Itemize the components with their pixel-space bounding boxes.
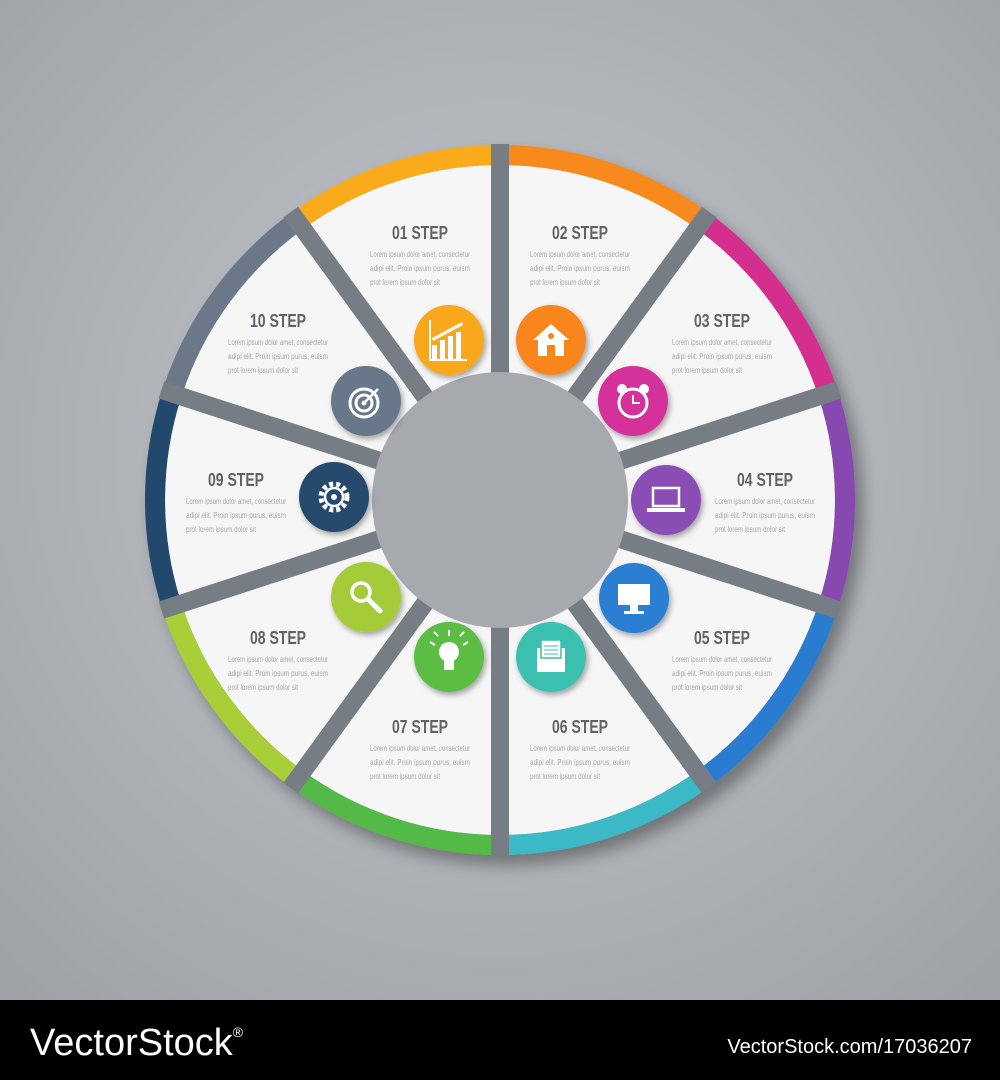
segment 09 [98,333,404,610]
text 02: prot lorem ipsum dolor sit [530,277,600,287]
text 03: prot lorem ipsum dolor sit [672,365,742,375]
icon 04: laptop [631,465,701,535]
watermark bar: ® [233,1024,244,1040]
icon 09: gear [299,462,369,532]
icon 06: mail [516,622,586,692]
segment 05 [532,531,838,808]
text 06: adipi elit. Proin ipsum purus, euism [530,757,630,767]
text 10: 10 STEP [250,311,306,331]
text 09: adipi elit. Proin ipsum purus, euism [186,510,286,520]
text 04: prot lorem ipsum dolor sit [715,524,785,534]
segment 06 [391,582,709,910]
text 07: prot lorem ipsum dolor sit [370,771,440,781]
text 02: Lorem ipsum dolor amet, consectetur [530,249,630,259]
text 04: adipi elit. Proin ipsum purus, euism [715,510,815,520]
text 06: prot lorem ipsum dolor sit [530,771,600,781]
text 07: 07 STEP [392,717,448,737]
segment 08 [122,459,441,787]
icon 03: alarm clock [598,366,668,436]
segment 07 [291,601,500,855]
text 05: 05 STEP [694,628,750,648]
text 10: adipi elit. Proin ipsum purus, euism [228,351,328,361]
watermark bar: VectorStock [30,1022,233,1064]
text 07 [370,717,470,781]
text 02 [530,223,630,287]
text 10: Lorem ipsum dolor amet, consectetur [228,337,328,347]
icon 08: magnifier [331,562,401,632]
text 02: 02 STEP [552,223,608,243]
icons [299,305,701,692]
text 10 [228,311,328,375]
text 01: Lorem ipsum dolor amet, consectetur [370,249,470,259]
text 08: adipi elit. Proin ipsum purus, euism [228,668,328,678]
text 07: adipi elit. Proin ipsum purus, euism [370,757,470,767]
text 09: Lorem ipsum dolor amet, consectetur [186,496,286,506]
text 06 [530,717,630,781]
text 10: prot lorem ipsum dolor sit [228,365,298,375]
text 08: Lorem ipsum dolor amet, consectetur [228,654,328,664]
text 09: 09 STEP [208,470,264,490]
text 05: adipi elit. Proin ipsum purus, euism [672,668,772,678]
text 04: 04 STEP [737,470,793,490]
texts [186,223,815,781]
icon 10: target [331,366,401,436]
icon 07: bulb [414,622,484,692]
text 01: 01 STEP [392,223,448,243]
icon 01: chart [414,305,484,375]
segment 01 [291,90,609,418]
text 03 [672,311,772,375]
text 08: prot lorem ipsum dolor sit [228,682,298,692]
text 03: 03 STEP [694,311,750,331]
text 06: Lorem ipsum dolor amet, consectetur [530,743,630,753]
segment 04 [596,390,902,667]
text 08: 08 STEP [250,628,306,648]
text 01 [370,223,470,287]
text 08 [228,628,328,692]
segment 03 [559,213,878,541]
icon 05: monitor [599,563,669,633]
text 04 [715,470,815,534]
text 03: adipi elit. Proin ipsum purus, euism [672,351,772,361]
text 07: Lorem ipsum dolor amet, consectetur [370,743,470,753]
watermark bar [0,1000,1000,1080]
icon 02: house [516,305,586,375]
text 05: prot lorem ipsum dolor sit [672,682,742,692]
watermark bar: VectorStock.com/17036207 [727,1036,972,1058]
text 09: prot lorem ipsum dolor sit [186,524,256,534]
text 02: adipi elit. Proin ipsum purus, euism [530,263,630,273]
text 05 [672,628,772,692]
text 06: 06 STEP [552,717,608,737]
segment 10 [162,192,468,469]
text 01: prot lorem ipsum dolor sit [370,277,440,287]
text 03: Lorem ipsum dolor amet, consectetur [672,337,772,347]
text 04: Lorem ipsum dolor amet, consectetur [715,496,815,506]
segment 02 [500,145,709,399]
text 01: adipi elit. Proin ipsum purus, euism [370,263,470,273]
text 09 [186,470,286,534]
wheel [98,90,902,910]
text 05: Lorem ipsum dolor amet, consectetur [672,654,772,664]
